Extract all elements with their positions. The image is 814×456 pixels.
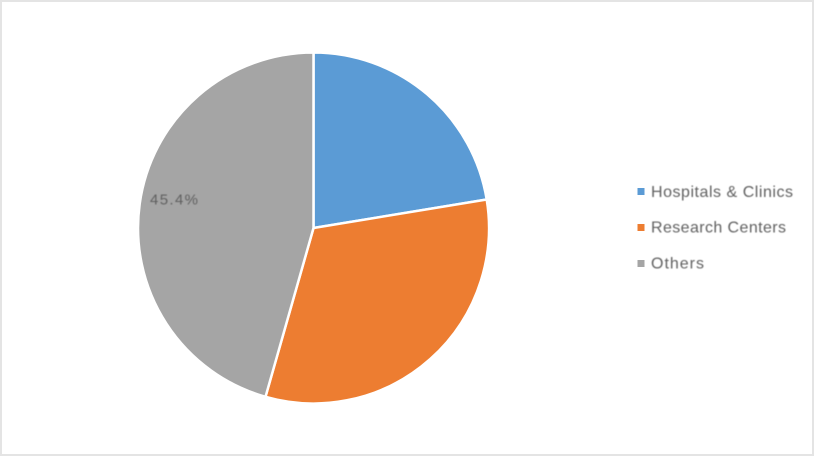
data label: Others 45.4%: 45.4%	[150, 192, 198, 208]
legend item: Hospitals & Clinics: Hospitals & Clinics	[651, 184, 793, 201]
slice: Hospitals & Clinics	[314, 52, 487, 228]
slice: Research Centers	[266, 200, 489, 404]
pie chart	[138, 52, 489, 404]
legend item: Others: Others	[651, 256, 704, 272]
slice: Others	[138, 52, 314, 397]
legend	[638, 184, 793, 272]
legend item: Research Centers: Research Centers	[651, 220, 786, 236]
